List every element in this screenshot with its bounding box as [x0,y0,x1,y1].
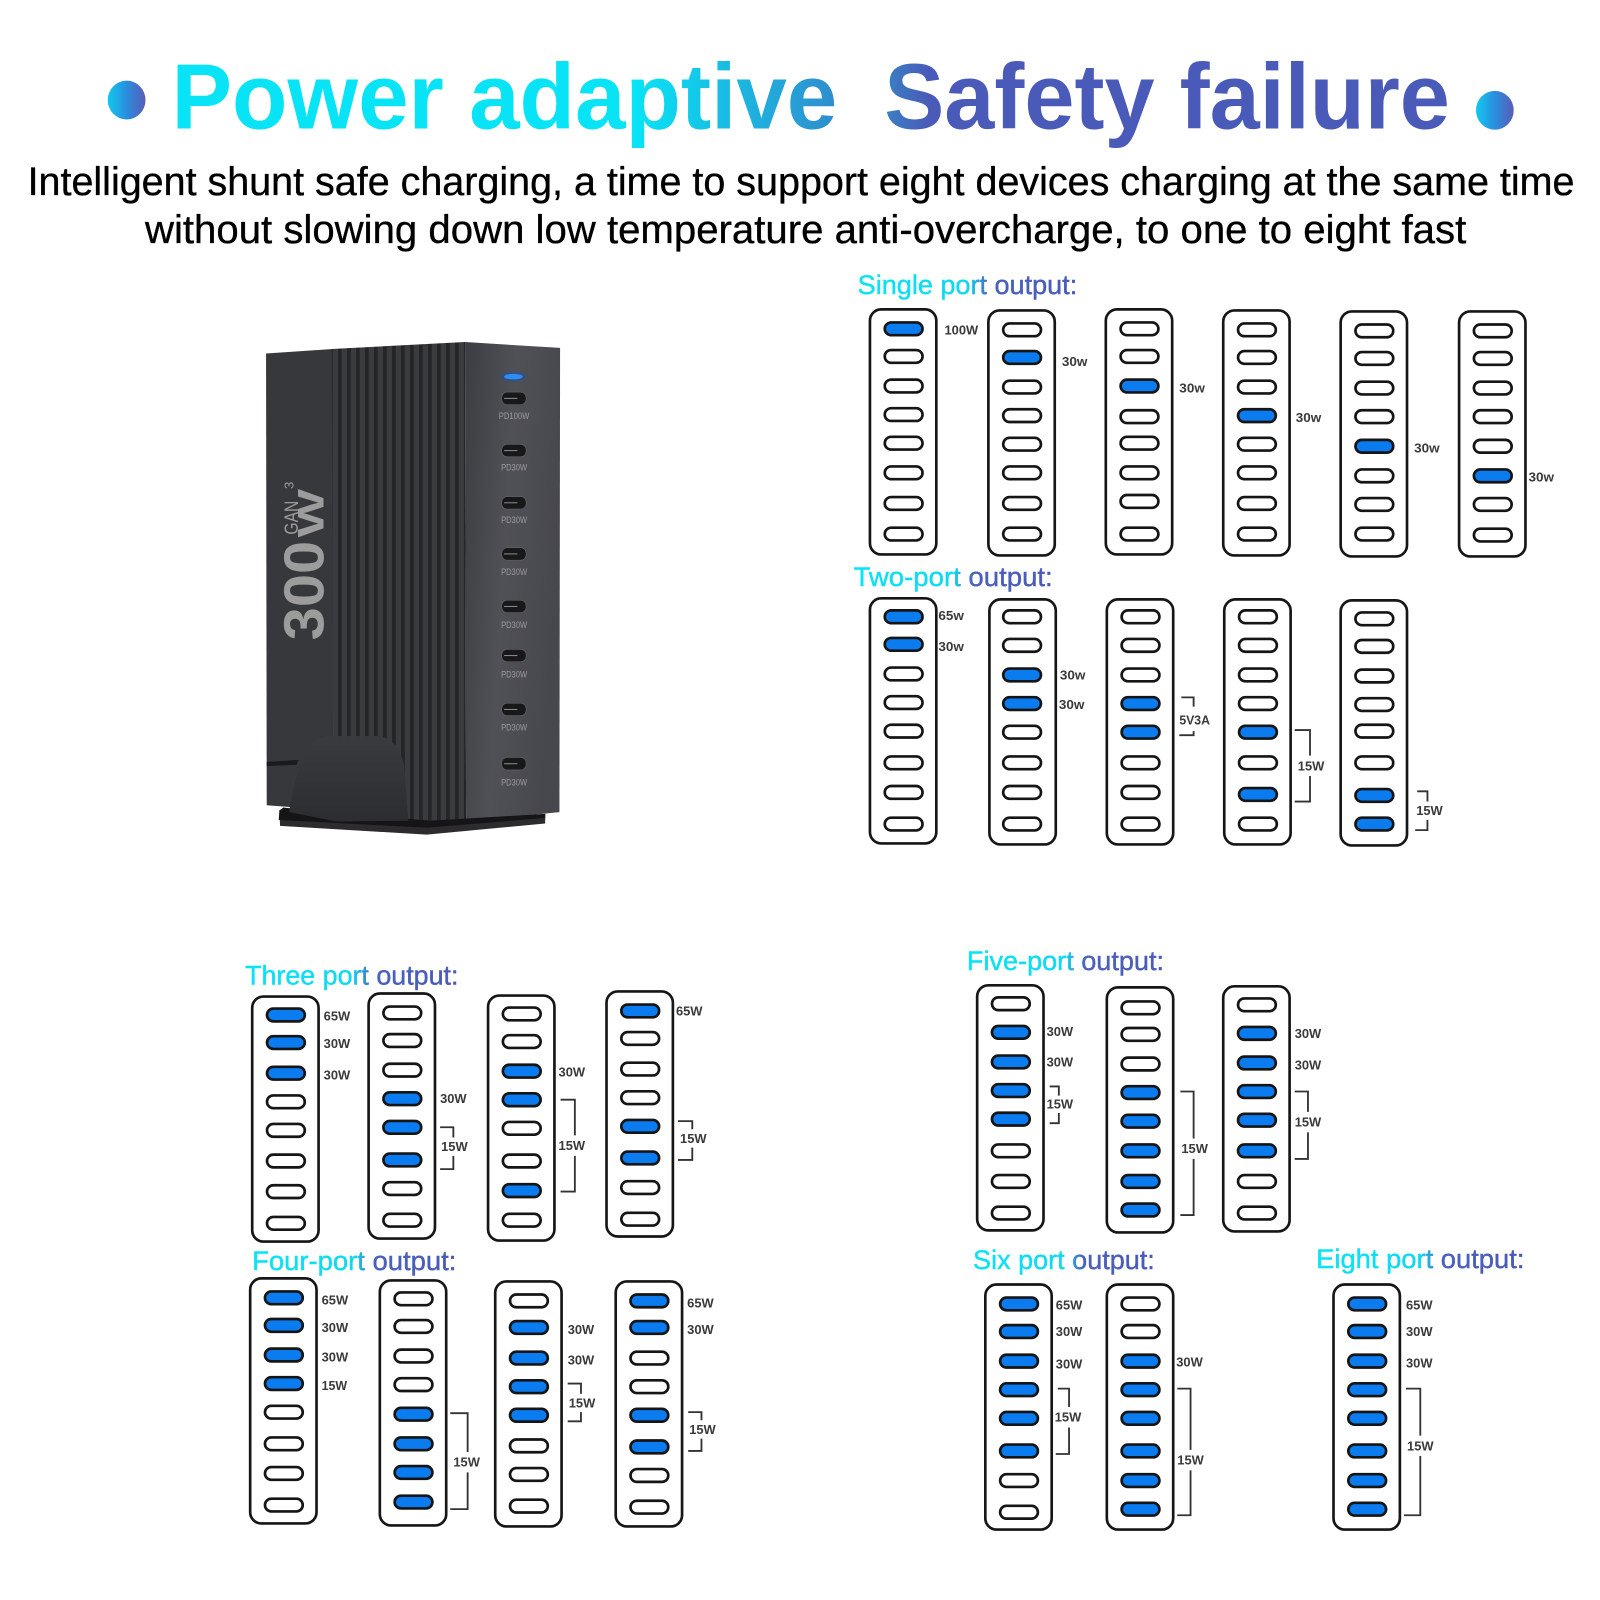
ports: PD30W [501,669,527,679]
strip 4: 65W [687,1295,714,1310]
strip 1: 65W [322,1292,349,1307]
strip 1: 30W [1056,1357,1083,1372]
strip 1: 100W: 100W [944,322,979,337]
strip 4: 15W: 15W [1298,758,1325,773]
strip 4: 30w [1223,310,1322,555]
strip: 65W [1406,1297,1433,1312]
strip 1: 65w 30w: 30w [938,639,965,654]
ports: PD100W [499,411,530,421]
strip 6: 30w [1459,311,1555,556]
strip 1: 100W [870,309,979,554]
strip [1334,1284,1434,1530]
ports: PD30W [501,722,527,733]
heading: three port: Three port output: [245,960,458,990]
strip 1: 30W [324,1036,351,1051]
strip 2: 15W [453,1455,480,1470]
strip 3: 15W [559,1138,586,1153]
bracket [561,1100,575,1192]
strip 4: 15W [680,1131,707,1146]
strip 1: 15W [322,1378,348,1393]
strip 1: 65W [1056,1297,1083,1312]
strip: 30W [1406,1324,1433,1339]
strip 2: 30w [988,310,1088,555]
strip 3: 30W [1295,1026,1322,1041]
strip 3: 5V3A [1107,599,1210,844]
brand text [272,482,336,640]
strip 3: 15W [569,1395,596,1410]
strip 3 [495,1281,596,1526]
title: Safety failure: Safety failure [884,45,1450,149]
ports [499,392,530,788]
ports: PD30W [501,620,527,630]
strip 2: 30w 30w [989,599,1086,844]
heading: four-port: Four-port output: [252,1246,456,1276]
brand text: 3 [282,482,296,489]
ports: PD30W [501,567,527,577]
strip 1: 30W [324,1068,351,1083]
strip 2: 15W [1177,1453,1204,1468]
strip 2: 30W [440,1091,467,1106]
panel: six port output [973,1245,1204,1530]
title: Power adaptive: Power adaptive [172,45,837,149]
bracket [450,1413,468,1509]
strip 5: 15W [1341,600,1443,845]
strip 5: 30w [1341,311,1440,556]
strip 2: 30w 30w: 30w [1059,697,1085,712]
charger right face [465,342,560,821]
heading: six port: Six port output: [973,1245,1155,1275]
indicator LED [501,372,526,381]
strip 4: 30W [687,1322,714,1337]
subtitle text: Intelligent shunt safe charging, a time to support eight devices charging at the same time [28,160,1574,204]
strip 3 [1223,986,1322,1231]
strip 2 [1107,1284,1204,1530]
strip 3: 5V3A: 5V3A [1179,712,1210,727]
strip 1: 65w 30w [870,598,965,843]
strip 5: 15W: 15W [1416,803,1443,818]
strip 2 [380,1280,480,1525]
strip 1: 15W [1055,1410,1082,1425]
strip 2: 15W [441,1139,468,1154]
bullet dot left [108,81,146,119]
strip: 15W [1407,1438,1434,1453]
strip 1: 30W [322,1349,349,1364]
heading: five-port: Five-port output: [967,946,1164,976]
bracket [688,1412,701,1451]
strip 4: 65W [676,1003,703,1018]
ports: PD30W [501,777,527,788]
strip 4: 15W [1224,599,1325,844]
panel: single port output [858,270,1555,556]
strip 5: 30w: 30w [1414,441,1440,456]
strip: 30W [1406,1356,1433,1371]
bracket [1056,1389,1069,1454]
strip 4 [607,991,707,1237]
bracket [1050,1086,1059,1123]
strip 4: 30w: 30w [1296,410,1322,425]
heading: single port: Single port output: [858,270,1077,300]
strip 2: 30W [1176,1355,1203,1370]
strip 3: 30w: 30w [1179,381,1206,396]
subtitle text [28,160,1574,252]
title [108,45,1514,149]
bracket [1415,791,1427,830]
strip 1: 15W [1047,1096,1074,1111]
strip 1 [252,997,351,1242]
panel: eight port output [1316,1244,1524,1530]
strip 1: 30W [1056,1324,1083,1339]
bracket [1295,1092,1308,1159]
bracket [1404,1389,1420,1515]
bracket [1295,730,1310,802]
heading: eight port: Eight port output: [1316,1244,1524,1274]
bracket [678,1121,692,1160]
strip 2: 30w 30w: 30w [1060,667,1086,682]
charger ribbed centre [332,342,466,822]
strip 1: 30W [1047,1024,1074,1039]
charger left face [266,349,334,810]
strip 1 [985,1284,1083,1530]
heading: two-port: Two-port output: [854,562,1053,592]
strip 3: 30W [1295,1057,1322,1072]
strip 1 [977,985,1074,1230]
ports: PD30W [501,515,527,525]
phone stand [289,736,408,821]
strip 1: 65w 30w: 65w [938,608,965,623]
strip 4 [616,1281,716,1526]
ports: PD30W [501,462,527,472]
panel: three port output [245,960,707,1242]
strip 2 [1107,987,1208,1232]
strip 6: 30w: 30w [1529,469,1555,484]
brand text: W [291,489,332,537]
bracket [568,1384,581,1421]
product: 300W GaN charger [266,342,560,835]
strip 4: 15W [689,1422,716,1437]
bracket [1179,697,1194,735]
strip 1 [250,1278,349,1523]
strip 3: 15W [1295,1115,1322,1130]
strip 3: 30w [1106,309,1206,554]
brand text: GAN [281,501,303,535]
bracket [440,1127,453,1169]
subtitle text: without slowing down low temperature anti-overcharge, to one to eight fast [144,208,1466,252]
strip 2 [369,993,468,1239]
bracket [1177,1389,1191,1515]
panel: four-port output [250,1246,716,1526]
strip 3: 30W [568,1353,595,1368]
bullet dot right [1476,91,1514,130]
strip 2: 30w: 30w [1062,354,1088,369]
strip 1: 30W [322,1320,349,1335]
strip 3: 30W [559,1065,586,1080]
strip 3: 30W [568,1322,595,1337]
panel: two-port output [854,562,1443,845]
brand text: 300 [272,541,336,640]
panel: five-port output [967,946,1322,1232]
base plate [267,760,545,835]
strip 3 [488,996,586,1241]
bracket [1180,1092,1194,1215]
strip 1: 65W [324,1008,351,1023]
strip 2: 15W [1181,1141,1208,1156]
strip 1: 30W [1047,1054,1074,1069]
